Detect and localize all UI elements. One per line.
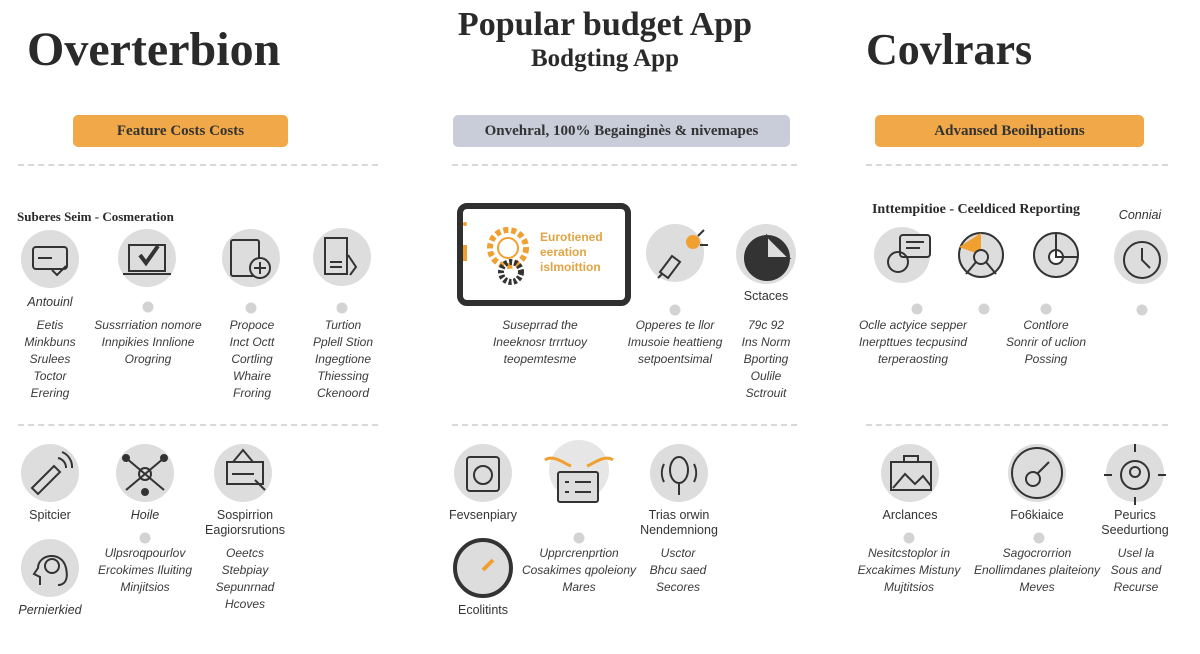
tablet text [540, 230, 603, 274]
panel: right column: Usel la [1118, 546, 1154, 560]
panel: right column: Sous and [1111, 563, 1161, 577]
tablet [460, 206, 628, 303]
panel: center column: Trias orwin [649, 508, 709, 522]
panel: center column: Ineeknosr trrrtuoy [493, 335, 587, 349]
label: Antouinl: Antouinl [27, 295, 73, 309]
panel: left column: Pernierkied [18, 603, 82, 617]
panel: left column: Minjitsios [120, 580, 170, 594]
panel: right column: Enollimdanes plaiteiony [974, 563, 1100, 577]
panel: center column: Fevsenpiary [449, 508, 517, 522]
panel: left column: Eagiorsrutions [205, 523, 285, 537]
panel: right column: Mujtitsios [884, 580, 934, 594]
panel: left column: Stebpiay [222, 563, 268, 577]
title: left: Overterbion [27, 23, 280, 76]
pill: right: Advansed Beoihpations [934, 123, 1085, 139]
panel: center column: Usctor [661, 546, 695, 560]
text col2: Sussrriation nomore [94, 318, 202, 332]
text col2: Innpikies Innlione [102, 335, 194, 349]
title: center: Popular budget App [458, 6, 752, 43]
panel: center column: setpoentsimal [638, 352, 712, 366]
pill: center [453, 115, 790, 147]
tablet text: eeration [540, 245, 587, 259]
text col4: Ingegtione [315, 352, 371, 366]
text col1: Eetis [37, 318, 63, 332]
text col4: Turtion [325, 318, 361, 332]
tablet text: Eurotiened [540, 230, 603, 244]
panel: center column: Nendemniong [640, 523, 718, 537]
panel: right column: terperaosting [878, 352, 948, 366]
text col4 [313, 318, 373, 400]
panel: center column: Imusoie heattieng [628, 335, 722, 349]
panel: right column: Possing [1025, 352, 1067, 366]
text col2 [94, 318, 202, 366]
panel: center column: Sctaces [744, 289, 788, 303]
panel: right column [858, 202, 1169, 594]
title: center [458, 6, 752, 72]
panel: left column: Sepunrnad [216, 580, 274, 594]
text col1: Srulees [30, 352, 70, 366]
text col3: Froring [233, 386, 271, 400]
text col1: Erering [31, 386, 69, 400]
panel: center column: Bporting [744, 352, 788, 366]
text col3 [230, 318, 275, 400]
panel: right column: Meves [1019, 580, 1055, 594]
panel: right column: Contlore [1023, 318, 1069, 332]
text col3: Inct Octt [230, 335, 274, 349]
panel: right column: Nesitcstoplor in [868, 546, 950, 560]
panel: left column: Hoile [131, 508, 159, 522]
text col2: Orogring [125, 352, 171, 366]
panel: center column: 79c 92 [748, 318, 784, 332]
panel: right column: Excakimes Mistuny [858, 563, 960, 577]
text col4: Pplell Stion [313, 335, 373, 349]
text col1: Toctor [34, 369, 66, 383]
panel: center column [449, 203, 796, 617]
panel: left column [17, 209, 373, 617]
pill: right [875, 115, 1144, 147]
subtitle right: Inttempitioe - Ceeldiced Reporting [872, 202, 1080, 217]
title: right: Covlrars [866, 25, 1032, 74]
lower labels: Spitcier [29, 508, 71, 522]
panel: center column: Mares [562, 580, 596, 594]
panel: right column: Conniai [1119, 208, 1161, 222]
panel: left column: Sospirrion [217, 508, 273, 522]
title: center: Bodgting App [531, 45, 679, 72]
icons row left [21, 228, 371, 597]
panel: left column: Ulpsroqpourlov [105, 546, 185, 560]
panel: center column: Secores [656, 580, 700, 594]
tablet text: islmoittion [540, 260, 601, 274]
panel: center column: Ecolitints [458, 603, 508, 617]
text col3: Propoce [230, 318, 274, 332]
text col3: Whaire [233, 369, 271, 383]
pill: left [73, 115, 288, 147]
panel: right column: Peurics [1114, 508, 1156, 522]
text col1 [24, 318, 76, 400]
panel: right column: Seedurtiong [1101, 523, 1169, 537]
text col1: Minkbuns [24, 335, 76, 349]
panel: right column: Sagocrorrion [1003, 546, 1071, 560]
panel: right column: Arclances [883, 508, 937, 522]
text col4: Ckenoord [317, 386, 369, 400]
pill: center: Onvehral, 100% Begainginès & nivemapes [485, 123, 758, 139]
panel: center column: Ins Norm [742, 335, 790, 349]
panel: center column: Cosakimes qpoleiony [522, 563, 636, 577]
text col3: Cortling [231, 352, 273, 366]
panel: center column: Oulile [751, 369, 781, 383]
panel: right column: Fo6kiaice [1010, 508, 1064, 522]
subtitle left: Suberes Seim - Cosmeration [17, 209, 174, 224]
panel: left column: Oeetcs [226, 546, 264, 560]
panel: right column: Oclle actyice sepper [859, 318, 967, 332]
panel: center column: teopemtesme [504, 352, 576, 366]
panel: center column: Sctrouit [746, 386, 786, 400]
text col4: Thiessing [317, 369, 369, 383]
pill: left: Feature Costs Costs [117, 123, 244, 139]
panel: left column: Ercokimes Iluiting [98, 563, 192, 577]
panel: right column: Recurse [1114, 580, 1158, 594]
panel: center column: Suseprrad the [502, 318, 578, 332]
panel: left column: Hcoves [225, 597, 265, 611]
panel: center column: Opperes te llor [636, 318, 714, 332]
panel: center column: Bhcu saed [650, 563, 706, 577]
panel: right column: Inerpttues tecpusind [859, 335, 967, 349]
panel: right column: Sonrir of uclion [1006, 335, 1086, 349]
panel: center column: Upprcrenprtion [539, 546, 619, 560]
